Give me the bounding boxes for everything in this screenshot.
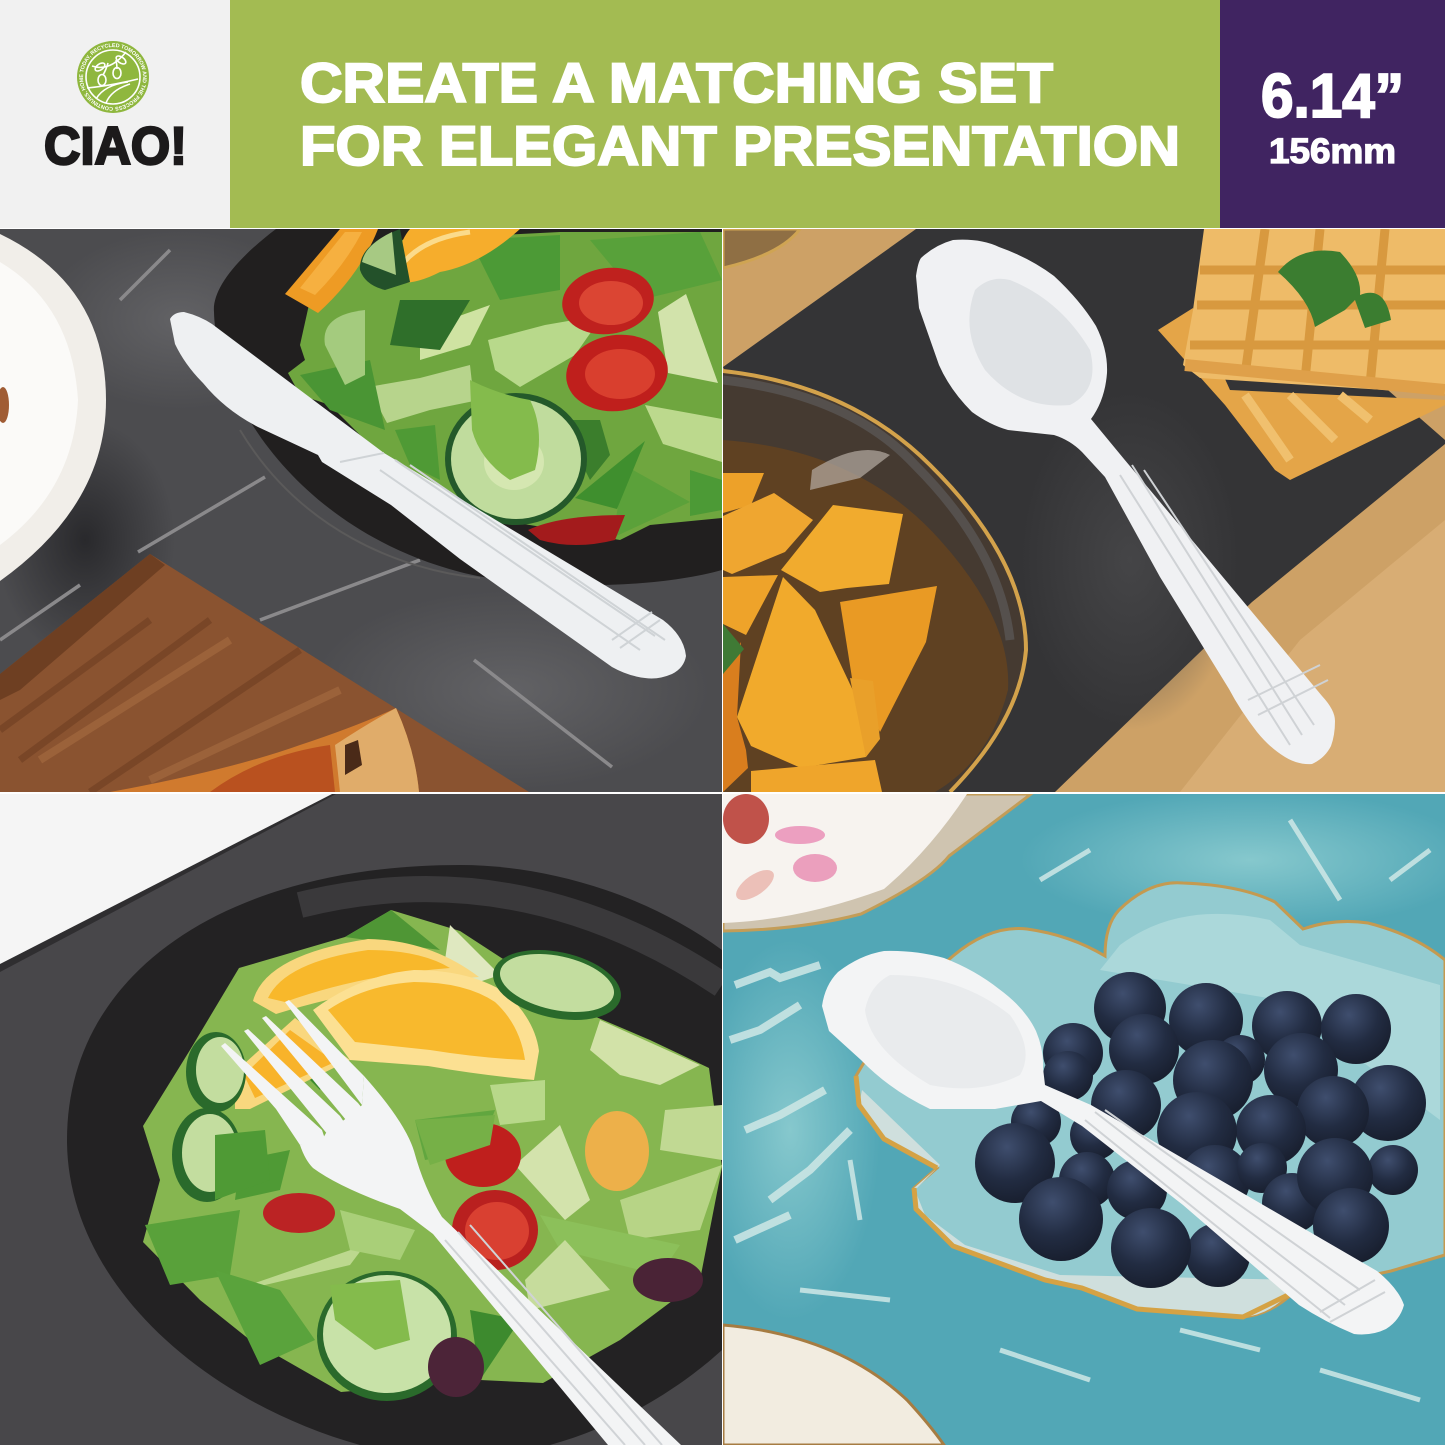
spoon bbox=[822, 951, 1404, 1334]
photo: fork with salad on black plate bbox=[0, 794, 722, 1445]
white paper bbox=[0, 794, 336, 972]
tomatoes bbox=[528, 262, 673, 545]
tomatoes bbox=[263, 1111, 703, 1397]
size in millimetres: 156mm bbox=[1269, 132, 1396, 171]
logo wordmark: CIAO! bbox=[44, 117, 187, 176]
white plate bbox=[723, 1325, 944, 1445]
black plate bbox=[67, 865, 722, 1445]
knife bbox=[170, 312, 686, 678]
blueberries bbox=[975, 972, 1426, 1288]
yogurt bowl bbox=[723, 794, 1031, 931]
header band bbox=[0, 0, 1445, 228]
title line 2: FOR ELEGANT PRESENTATION bbox=[300, 114, 1180, 177]
title line 1: CREATE A MATCHING SET bbox=[300, 51, 1053, 114]
glass bowl bbox=[856, 883, 1445, 1317]
icon: recycling olive badge: CONTINUES. HOME TODAY, RECYCLED TOMORROW AND THE PROCESS bbox=[79, 43, 147, 111]
cucumbers bbox=[172, 939, 627, 1401]
mango chunks bbox=[723, 473, 937, 792]
orange slices bbox=[285, 229, 520, 313]
cucumbers bbox=[324, 229, 587, 525]
white plate bbox=[0, 234, 106, 581]
photo: spoon with mango and waffles bbox=[723, 229, 1445, 792]
table flecks bbox=[730, 820, 1430, 1400]
salad bbox=[170, 229, 722, 678]
pizza slice bbox=[110, 708, 419, 792]
logo panel bbox=[0, 0, 230, 228]
mint leaf bbox=[1278, 251, 1391, 328]
wooden board bbox=[0, 554, 529, 792]
salad bbox=[143, 910, 722, 1401]
slate board bbox=[723, 229, 1445, 792]
size panel bbox=[1220, 0, 1445, 228]
glass bowl bbox=[723, 371, 1026, 792]
photo: knife with salad on marble bbox=[0, 229, 722, 792]
black plate bbox=[214, 229, 722, 585]
title panel bbox=[230, 0, 1220, 228]
size in inches: 6.14” bbox=[1261, 62, 1404, 131]
fork bbox=[221, 1000, 681, 1445]
spoon bbox=[916, 240, 1335, 764]
waffles bbox=[1158, 229, 1445, 480]
orange slices bbox=[235, 939, 539, 1109]
photo: spoon with blueberries on teal table bbox=[723, 794, 1445, 1445]
